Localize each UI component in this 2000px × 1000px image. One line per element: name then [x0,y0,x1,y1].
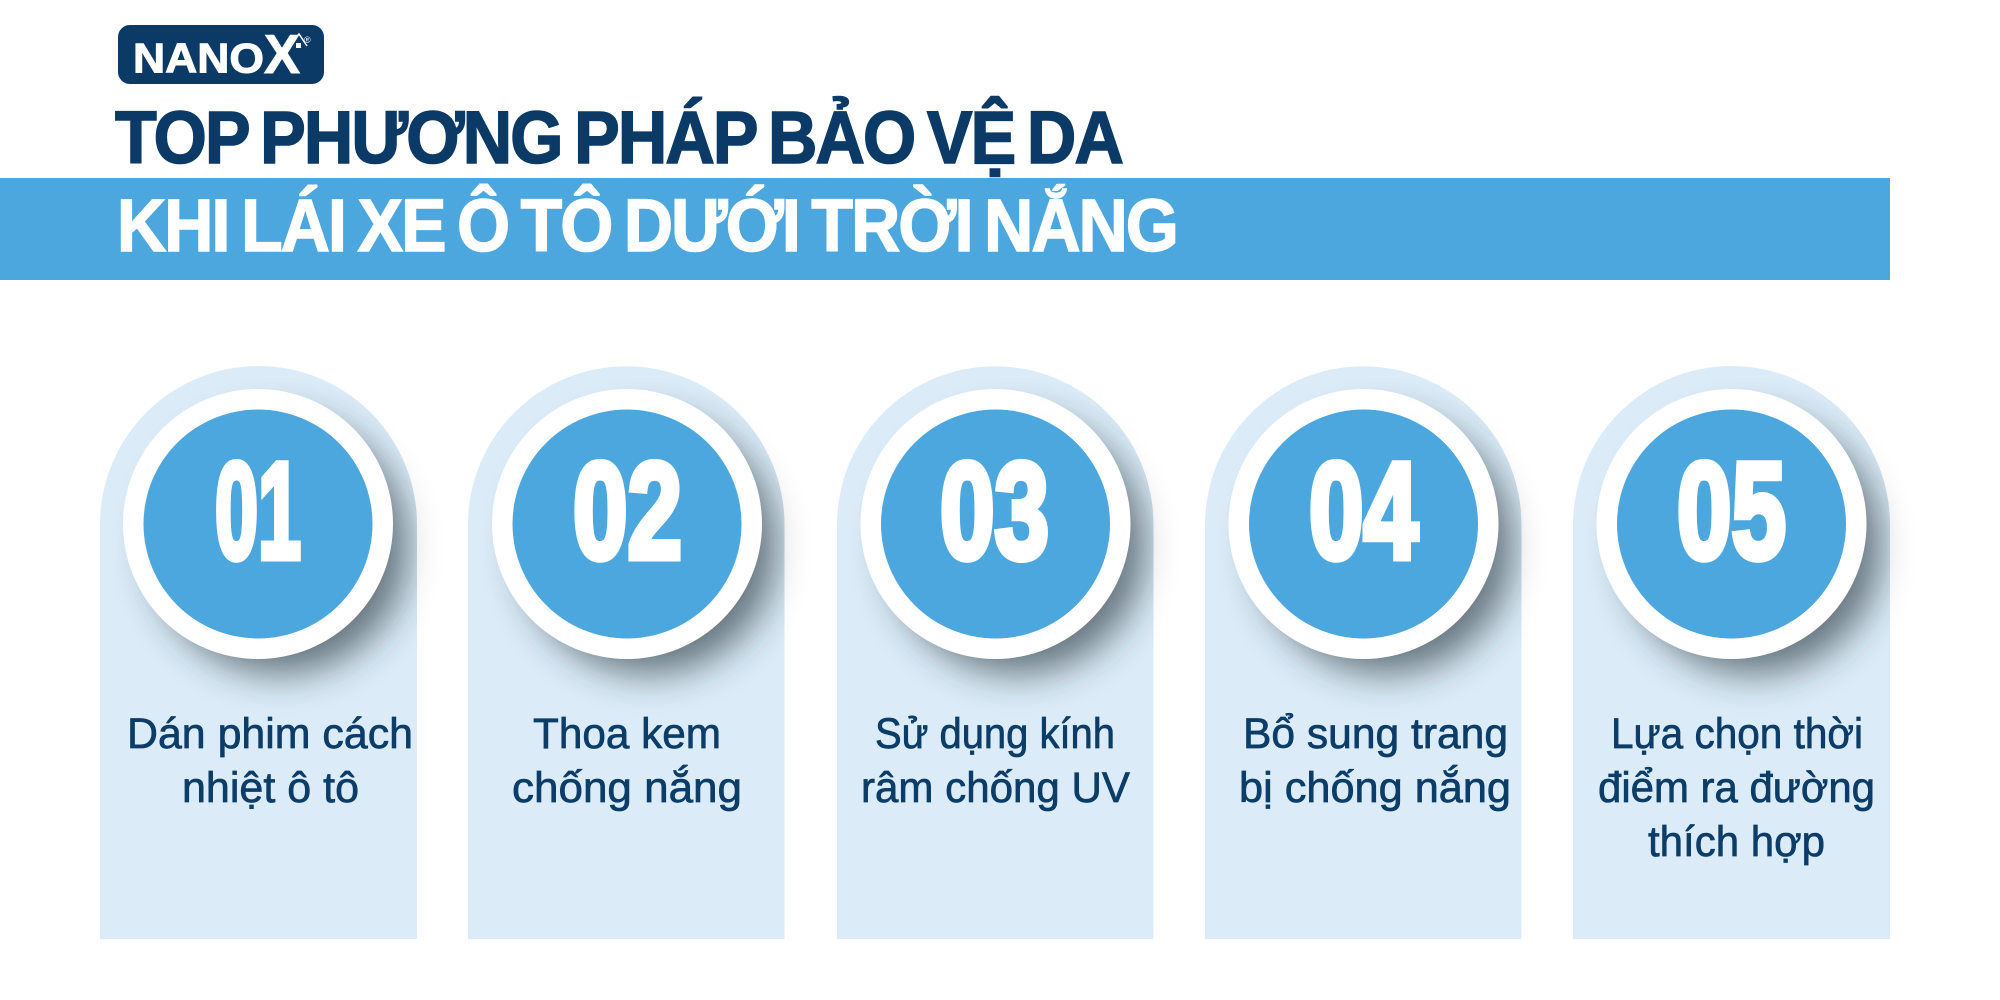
label 02: chống nắng [512,764,742,812]
label 01: nhiệt ô tô [182,764,359,812]
title line 2: KHI LÁI XE Ô TÔ DƯỚI TRỜI NẮNG [117,184,1177,267]
label 01: Dán phim cách [127,710,413,758]
panel: step 02 [468,366,784,939]
number 01: 01 [215,435,301,588]
logo: NanoX [118,23,324,85]
title band [0,178,1890,280]
panel: step 01 [100,366,417,939]
label 05 [1598,710,1875,866]
label 02: Thoa kem [533,710,721,758]
label 05: thích hợp [1648,818,1825,866]
label 03 [861,710,1130,812]
logo: NanoX: ® [304,35,311,45]
label 04: Bổ sung trang [1243,710,1508,758]
label 03: râm chống UV [861,764,1130,812]
logo: NanoX: NANO [133,34,264,82]
number 03: 03 [940,435,1049,588]
panel: step 03 [837,366,1154,939]
logo: NanoX: X [264,23,300,85]
panel: step 05 [1573,366,1890,939]
label 04: bị chống nắng [1239,764,1511,812]
title line 1: TOP PHƯƠNG PHÁP BẢO VỆ DA [115,96,1123,179]
label 02 [512,710,742,812]
number 05: 05 [1677,435,1786,588]
label 05: Lựa chọn thời [1611,710,1863,758]
number 02: 02 [573,435,682,588]
number 04: 04 [1309,435,1418,588]
panel: step 04 [1205,366,1522,939]
label 04 [1239,710,1511,812]
label 05: điểm ra đường [1598,764,1875,812]
label 01 [127,710,413,812]
label 03: Sử dụng kính [875,710,1115,758]
